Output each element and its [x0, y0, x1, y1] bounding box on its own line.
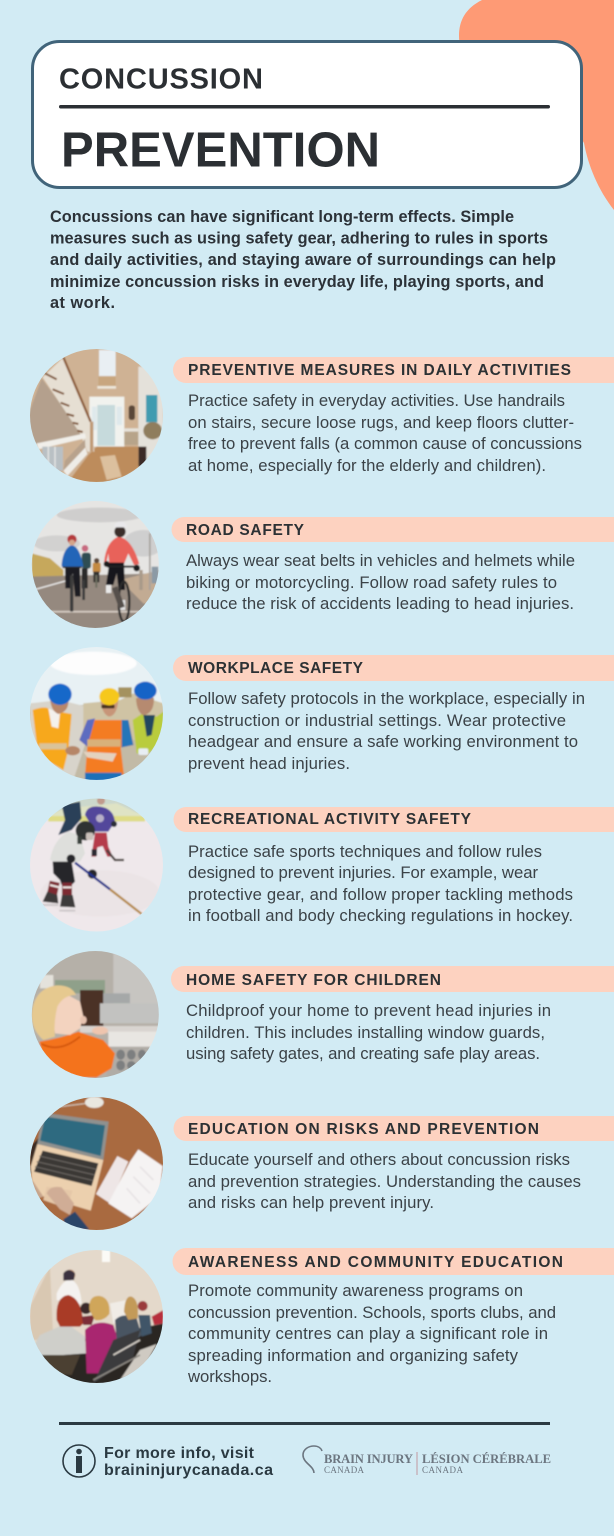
heading bar: ROAD SAFETY	[186, 522, 305, 539]
body text: Educate yourself and others about concussion risks	[188, 1150, 570, 1169]
body text	[188, 842, 573, 925]
heading bar: PREVENTIVE MEASURES IN DAILY ACTIVITIES	[188, 362, 571, 379]
heading bar	[173, 655, 614, 681]
logo: Brain Injury Canada: CANADA	[422, 1465, 464, 1475]
heading bar	[171, 966, 614, 992]
body text: Practice safety in everyday activities. Use handrails	[188, 391, 565, 410]
body text	[187, 1281, 556, 1386]
heading bar: EDUCATION ON RISKS AND PREVENTION	[188, 1121, 539, 1138]
body text: using safety gates, and creating safe play areas.	[186, 1044, 540, 1063]
logo: Brain Injury Canada: BRAIN INJURY	[324, 1452, 413, 1466]
body text: designed to prevent injuries. For example, wear	[188, 863, 538, 882]
body text	[186, 1001, 551, 1063]
purple player	[85, 806, 115, 832]
body text: protective gear, and follow proper tackling methods	[188, 885, 573, 904]
decorative orange blob	[459, 0, 614, 210]
heading bar: RECREATIONAL ACTIVITY SAFETY	[188, 811, 472, 828]
body text: on stairs, secure loose rugs, and keep floors clutter-	[188, 413, 574, 432]
intro text: measures such as using safety gear, adhering to rules in sports	[50, 230, 548, 248]
body text: prevent head injuries.	[188, 754, 350, 773]
far player dark	[58, 802, 82, 835]
title box	[32, 42, 582, 188]
footer: more info	[63, 1445, 273, 1479]
body text: free to prevent falls (a common cause of concussions	[188, 434, 582, 453]
photo: children playing ice hockey	[27, 797, 167, 937]
more info text	[104, 1445, 273, 1479]
body text: in football and body checking regulations in hockey.	[188, 906, 573, 925]
more info text: For more info, visit	[104, 1445, 255, 1462]
logo: Brain Injury Canada	[303, 1446, 551, 1475]
logo: Brain Injury Canada: LÉSION CÉRÉBRALE	[422, 1452, 551, 1466]
photo: cyclists on a road	[32, 501, 159, 628]
blue cyclist	[62, 545, 83, 567]
heading bar	[174, 1116, 614, 1141]
body text	[188, 391, 582, 475]
heading bar	[174, 807, 614, 832]
panel: workplace safety	[27, 643, 614, 783]
heading bar: WORKPLACE SAFETY	[188, 660, 364, 677]
icon: info	[63, 1445, 95, 1477]
body text: children. This includes installing window guards,	[186, 1023, 545, 1042]
photo: home entryway with staircase	[27, 347, 167, 487]
left worker	[33, 707, 72, 770]
body text	[188, 689, 585, 773]
center worker	[84, 719, 125, 775]
body text: headgear and ensure a safe working environment to	[188, 732, 578, 751]
body text	[188, 1150, 581, 1212]
body text: reduce the risk of accidents leading to head injuries.	[186, 594, 574, 613]
more info text: braininjurycanada.ca	[104, 1462, 273, 1479]
far cyclists	[93, 563, 101, 573]
logo: Brain Injury Canada: CANADA	[324, 1465, 364, 1475]
body text	[186, 551, 575, 613]
body text: Childproof your home to prevent head injuries in	[186, 1001, 551, 1020]
photo: construction workers in hard hats	[27, 643, 167, 783]
intro text: and daily activities, and staying aware of surroundings can help	[50, 251, 556, 269]
body text: concussion prevention. Schools, sports clubs, and	[188, 1303, 556, 1322]
body text: at home, especially for the elderly and children).	[188, 456, 546, 475]
red cyclist	[104, 537, 139, 565]
heading bar	[172, 1248, 614, 1275]
body text: Practice safe sports techniques and follow rules	[188, 842, 542, 861]
body text: spreading information and organizing safety	[188, 1346, 519, 1365]
intro text	[50, 208, 556, 312]
panel: home safety for children	[27, 947, 614, 1083]
icon: head outline	[303, 1446, 322, 1473]
panel: preventive measures in daily activities	[27, 347, 614, 487]
body text: biking or motorcycling. Follow road safety rules to	[186, 573, 557, 592]
title: prevention: PREVENTION	[61, 124, 380, 178]
panel: education on risks and prevention	[27, 1093, 614, 1233]
foreground player	[50, 832, 85, 863]
intro text: minimize concussion risks in everyday life, playing sports, and	[50, 273, 544, 291]
body text: workshops.	[187, 1367, 272, 1386]
intro text: at work.	[50, 294, 115, 312]
panel: recreational activity safety	[27, 797, 614, 937]
body text: and prevention strategies. Understanding the causes	[188, 1172, 581, 1191]
body text: Promote community awareness programs on	[188, 1281, 523, 1300]
photo: audience at a community workshop	[27, 1247, 167, 1387]
body text: and risks can help prevent injury.	[188, 1193, 434, 1212]
body text: construction or industrial settings. Wear protective	[188, 711, 566, 730]
panel: awareness and community education	[27, 1247, 614, 1387]
right worker	[133, 712, 163, 755]
heading bar	[173, 357, 614, 383]
heading bar: HOME SAFETY FOR CHILDREN	[186, 972, 441, 989]
intro text: Concussions can have significant long-term effects. Simple	[50, 208, 514, 226]
body text: Follow safety protocols in the workplace, especially in	[188, 689, 585, 708]
panel: road safety	[27, 497, 614, 633]
body text: community centres can play a significant role in	[188, 1324, 548, 1343]
heading bar: AWARENESS AND COMMUNITY EDUCATION	[188, 1254, 563, 1271]
photo: laptop and papers on wooden desk	[27, 1093, 167, 1233]
body text: Always wear seat belts in vehicles and helmets while	[186, 551, 575, 570]
photo: toddler in orange hoodie	[32, 951, 159, 1078]
title: concussion: CONCUSSION	[59, 64, 263, 96]
heading bar	[171, 517, 614, 542]
